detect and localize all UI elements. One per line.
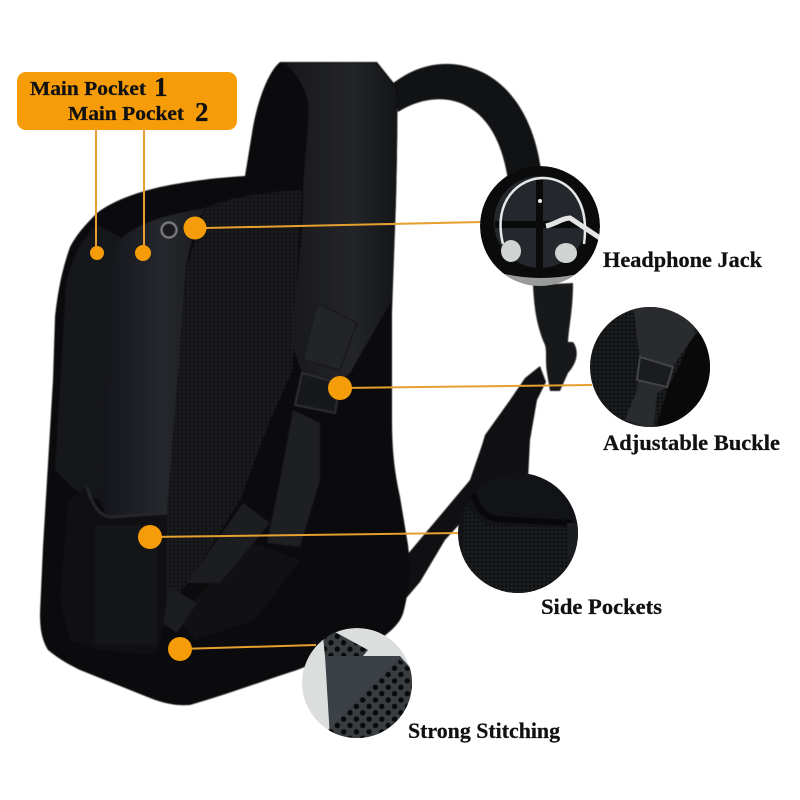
lower strap <box>187 503 270 583</box>
headphone jack ring <box>162 222 176 238</box>
side mesh pocket <box>60 487 167 655</box>
detail circle: strong stitching <box>302 628 415 745</box>
back mesh panel <box>165 190 302 610</box>
main pocket label: Main Pocket <box>68 103 184 125</box>
front pocket 1 <box>55 225 122 500</box>
strap webbing <box>267 410 320 547</box>
main pocket label: 1 <box>154 72 168 102</box>
label: side pockets: Side Pockets <box>541 594 662 619</box>
label: adjustable buckle: Adjustable Buckle <box>603 430 780 455</box>
main pocket label: 2 <box>195 97 208 127</box>
detail circle: adjustable buckle <box>590 305 715 430</box>
strap patch <box>303 303 357 370</box>
thin strap to body <box>392 366 546 628</box>
side pocket rim <box>87 487 167 517</box>
front pocket 2 <box>100 208 205 517</box>
strap buckle <box>295 373 340 413</box>
lower strap and buckle <box>533 283 577 391</box>
detail circle: headphone jack <box>480 166 600 290</box>
bottom strap <box>163 587 197 633</box>
callout marker dots <box>90 216 352 661</box>
main pocket label <box>17 72 237 130</box>
body silhouette <box>40 62 409 705</box>
label: headphone jack: Headphone Jack <box>603 247 763 272</box>
backpack illustration <box>40 62 577 705</box>
connector lines <box>96 130 592 649</box>
shoulder strap loop <box>392 64 541 200</box>
label: strong stitching: Strong Stitching <box>408 718 560 743</box>
main pocket label: Main Pocket <box>30 78 146 100</box>
detail circle: side pockets <box>458 473 578 600</box>
shoulder pad <box>284 63 397 381</box>
lower mesh back panel <box>180 540 300 640</box>
